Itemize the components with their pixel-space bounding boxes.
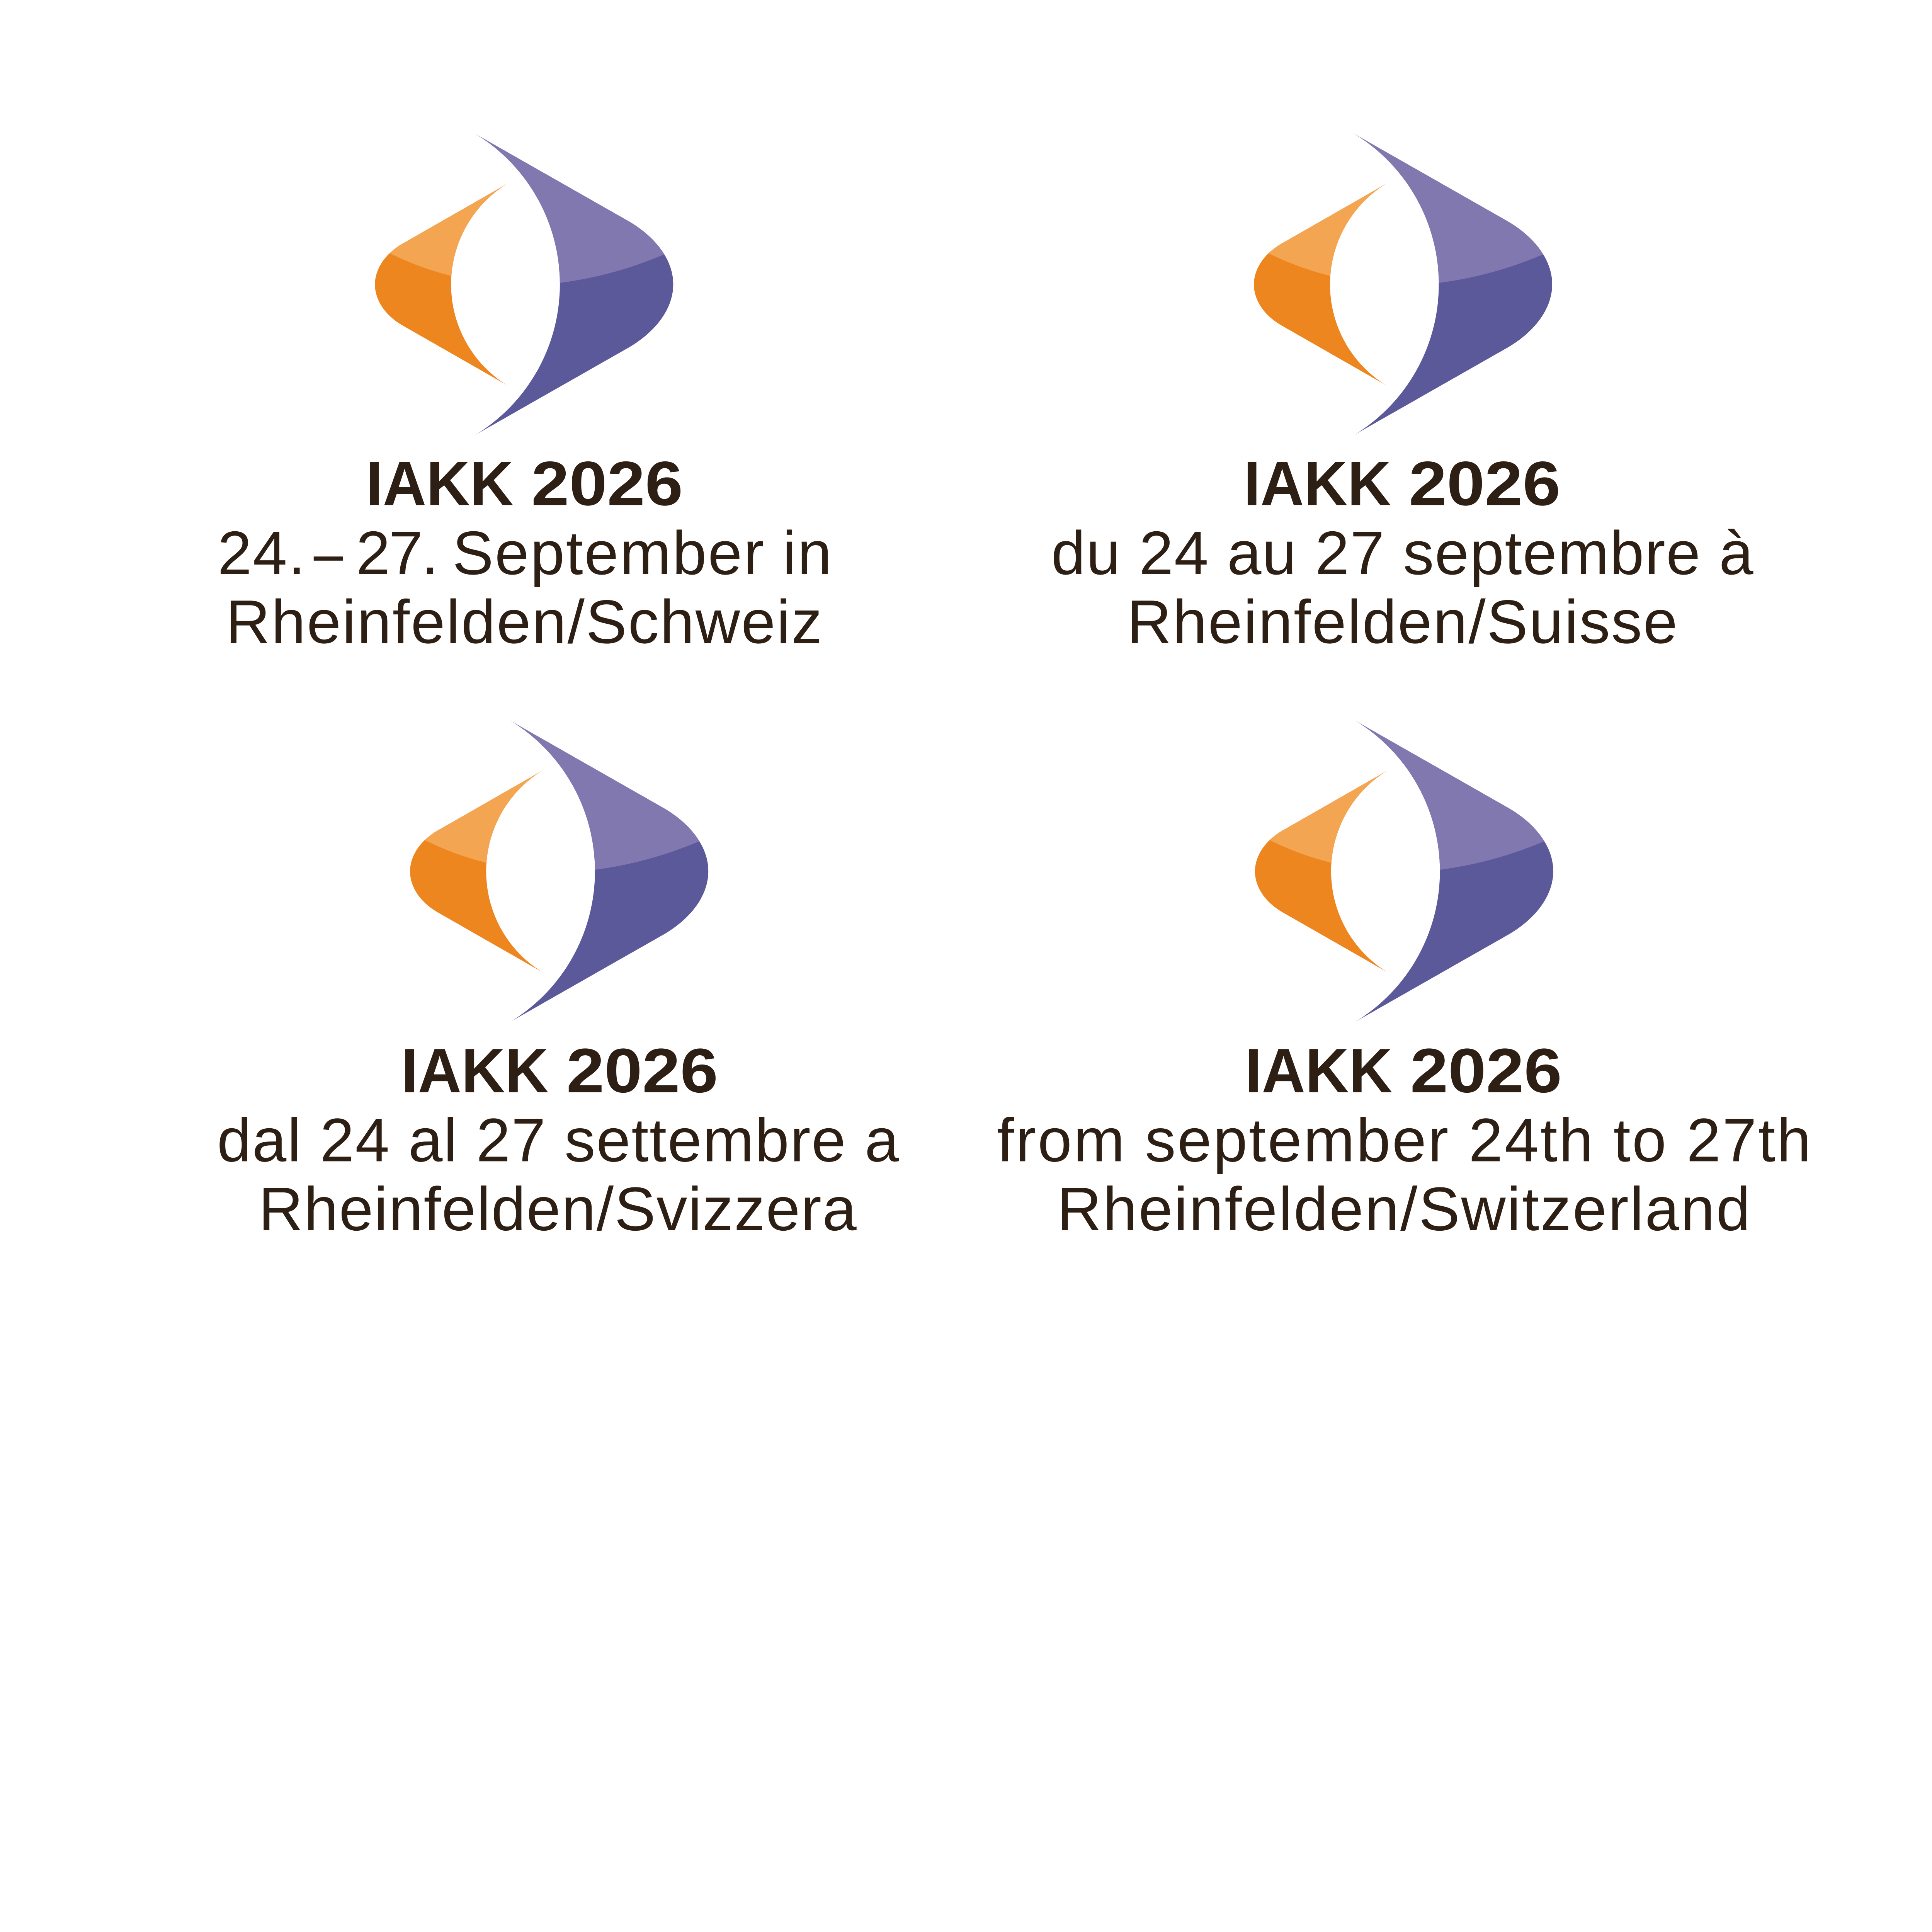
- heading: [401, 1036, 718, 1106]
- text: place: Rheinfelden/Svizzera: [259, 1175, 857, 1243]
- heading: 2026: [1409, 449, 1561, 519]
- panel: Italian announcement: [217, 721, 899, 1243]
- text: dates: September: [452, 519, 764, 587]
- icon: IAKK logo: [375, 134, 673, 435]
- text: dates: 27.: [356, 519, 439, 587]
- text: dates: in: [782, 519, 832, 587]
- icon: IAKK logo: [1254, 134, 1552, 435]
- text: dates: 24.: [218, 519, 305, 587]
- icon: IAKK logo: [410, 721, 708, 1022]
- text: dates: [218, 519, 832, 587]
- heading: 2026: [566, 1036, 718, 1106]
- text: place: Rheinfelden/Suisse: [1127, 587, 1677, 656]
- text: dates: dal 24 al 27 settembre a: [217, 1105, 899, 1174]
- heading: [366, 449, 683, 519]
- text: place: Rheinfelden/Schweiz: [226, 587, 822, 656]
- heading: IAKK: [1244, 449, 1391, 519]
- heading: IAKK: [366, 449, 514, 519]
- heading: IAKK: [401, 1036, 549, 1106]
- text: dates: from september 24th to 27th: [997, 1105, 1811, 1174]
- panel: German announcement: [218, 134, 832, 656]
- heading: IAKK: [1245, 1036, 1392, 1106]
- icon: IAKK logo: [1255, 721, 1553, 1022]
- text: place: Rheinfelden/Switzerland: [1057, 1175, 1750, 1243]
- heading: [1244, 449, 1561, 519]
- panel: English announcement: [997, 721, 1811, 1243]
- heading: [1245, 1036, 1562, 1106]
- heading: 2026: [1410, 1036, 1562, 1106]
- panel: French announcement: [1051, 134, 1753, 656]
- text: dates: du 24 au 27 septembre à: [1051, 519, 1753, 587]
- text: dates: –: [314, 519, 343, 587]
- heading: 2026: [531, 449, 683, 519]
